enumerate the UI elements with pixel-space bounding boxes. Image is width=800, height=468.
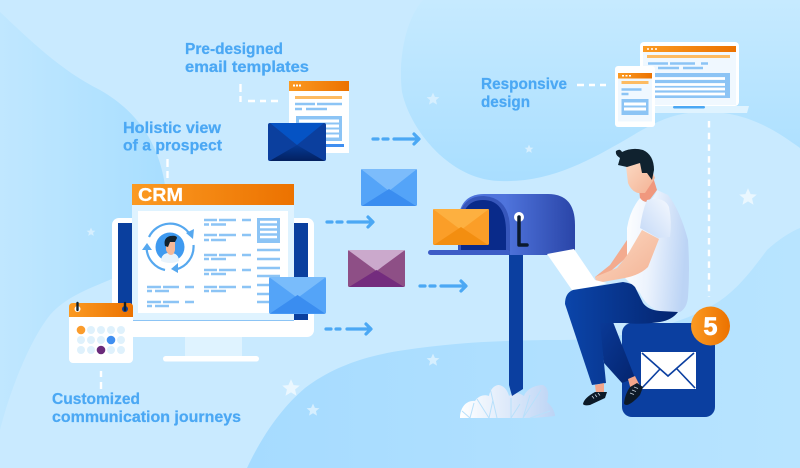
near arm xyxy=(595,230,659,283)
heading: responsive design xyxy=(481,76,567,111)
monitor envelope xyxy=(269,277,326,314)
mailbox flag xyxy=(514,212,524,222)
light blue envelope xyxy=(361,169,417,206)
seat envelope icon xyxy=(641,352,696,389)
flow arrows xyxy=(326,134,466,334)
heading: customized communication journeys: Customized xyxy=(52,391,140,408)
hair xyxy=(616,149,654,180)
background blob: left xyxy=(0,12,165,430)
far ankle xyxy=(628,376,640,390)
background blob: top right xyxy=(401,0,800,181)
torso xyxy=(625,190,689,312)
calendar xyxy=(69,303,133,363)
purple envelope xyxy=(348,250,405,287)
document icon xyxy=(257,218,280,243)
CRM panel xyxy=(132,184,294,321)
text lines xyxy=(147,220,280,306)
face xyxy=(626,160,655,193)
mail box seat with badge xyxy=(622,306,730,417)
responsive laptop xyxy=(640,42,749,113)
monitor xyxy=(112,218,314,362)
man with laptop xyxy=(547,149,689,405)
decorative stars xyxy=(87,93,757,416)
heading: customized communication journeys xyxy=(52,391,241,426)
heading: responsive design: Responsive xyxy=(481,76,567,93)
near shoe xyxy=(583,392,607,405)
far leg xyxy=(598,322,635,383)
orange envelope xyxy=(433,209,489,245)
plant xyxy=(460,385,555,418)
badge: 5 xyxy=(704,313,718,341)
sleeve xyxy=(640,199,671,238)
dark blue envelope xyxy=(268,123,326,161)
heading: pre-designed email templates: Pre-designed xyxy=(185,41,283,58)
neck xyxy=(638,177,657,202)
heading: customized communication journeys: communication journeys xyxy=(52,409,241,426)
white dashed connectors xyxy=(101,84,709,389)
mailbox xyxy=(428,194,575,396)
near ankle xyxy=(595,383,604,393)
heading: holistic view of a prospect: of a prospect xyxy=(123,138,223,154)
mailbox body xyxy=(458,194,575,255)
far shoe xyxy=(624,383,643,405)
heading: responsive design: design xyxy=(481,94,530,111)
heading: holistic view of a prospect xyxy=(123,120,223,154)
avatar with circular arrows xyxy=(142,224,194,273)
far arm xyxy=(595,240,627,283)
responsive tablet xyxy=(615,66,655,127)
heading: holistic view of a prospect: Holistic view xyxy=(123,120,222,137)
CRM title: CRM xyxy=(138,185,183,205)
background blob: bottom xyxy=(247,228,800,468)
arrow: third xyxy=(326,324,371,334)
thighs and near leg xyxy=(565,282,678,385)
arrow: second xyxy=(327,217,373,227)
heading: pre-designed email templates xyxy=(185,41,309,76)
heading: pre-designed email templates: email templates xyxy=(185,59,309,76)
arrow: to mailbox xyxy=(420,281,466,291)
arrow: to top xyxy=(373,134,419,144)
post xyxy=(509,250,523,396)
template document xyxy=(289,81,349,153)
laptop xyxy=(547,249,607,290)
